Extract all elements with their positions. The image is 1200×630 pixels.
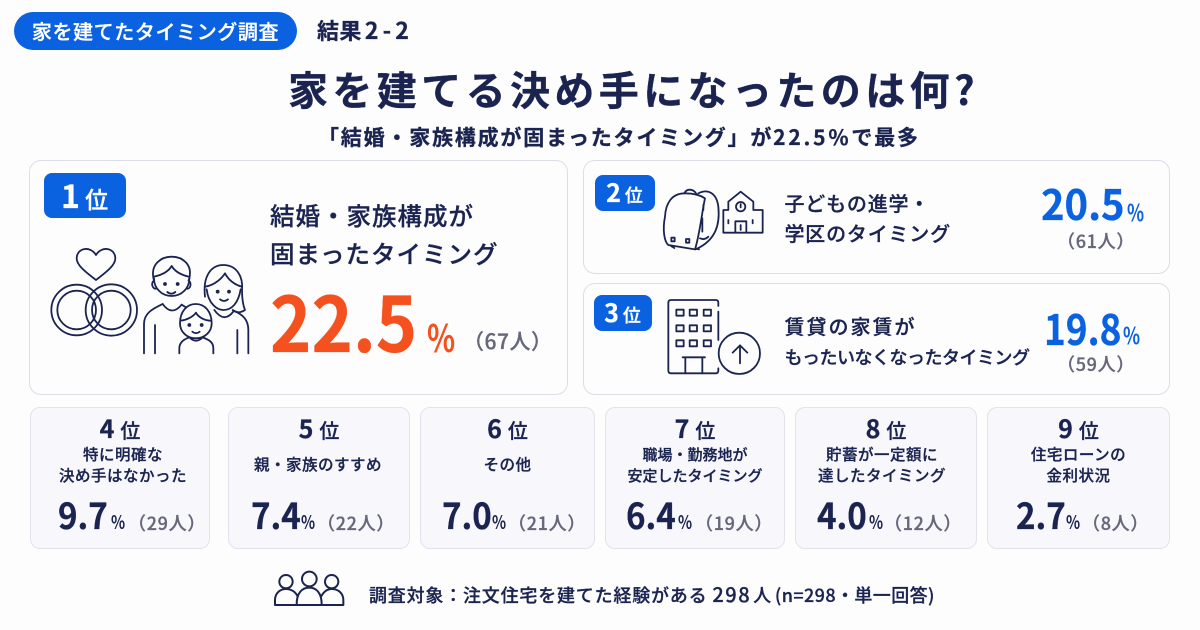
panel: rank 1 <box>29 160 568 395</box>
badge: 3rd place: 3 位 <box>604 294 641 330</box>
rank 7 label <box>627 444 762 486</box>
value: rank 3 percent: 19.8 <box>1044 296 1121 358</box>
tag: survey name: 家を建てたタイミング調査 <box>32 16 279 45</box>
rank 5 label: 親・家族のすすめ <box>254 453 382 475</box>
badge: 3rd place <box>594 294 652 330</box>
label: rank 3 reason: 賃貸の家賃が <box>784 310 916 340</box>
rank 4 percent sign: % <box>110 508 125 534</box>
rank 4 value: 9.7 <box>58 488 107 540</box>
rank 9 label: 金利状況 <box>1046 464 1110 486</box>
rank 9 label: 住宅ローンの <box>1031 443 1126 465</box>
rank 9 heading: 9 位 <box>1058 410 1099 446</box>
rank 6 percent sign: % <box>492 508 506 534</box>
backpack <box>664 190 719 249</box>
label: rank 2 reason <box>784 188 951 247</box>
panel: rank 3 <box>583 283 1170 395</box>
panel: rank 5 <box>228 407 410 549</box>
panel: rank 4 <box>30 407 210 549</box>
rank 6 value: 7.0 <box>442 488 491 540</box>
panel: rank 2 <box>583 160 1170 274</box>
count: rank 3: （59人） <box>1057 351 1135 377</box>
icon: apartment and arrow <box>667 299 761 375</box>
panel: rank 7 <box>605 407 785 549</box>
rank 4 count: （29人） <box>128 510 206 536</box>
subheading: 「結婚・家族構成が固まったタイミング」が22.5%で最多 <box>318 122 920 152</box>
rank 6 label: その他 <box>483 453 532 475</box>
rank 8 heading: 8 位 <box>866 410 906 446</box>
panel: rank 9 <box>987 407 1170 549</box>
footnote: survey target: 調査対象：注文住宅を建てた経験がある298人(n=298・単一回答) <box>369 579 935 608</box>
rank 5 count: （22人） <box>317 510 395 536</box>
child <box>179 304 213 353</box>
badge: 2nd place: 2 位 <box>606 174 643 210</box>
badge: 2nd place <box>594 174 654 210</box>
tag: survey name <box>14 12 297 50</box>
rank 9 value: 2.7 <box>1016 488 1065 540</box>
rank 6 count: （21人） <box>508 510 586 536</box>
label: rank 2 reason: 学区のタイミング <box>784 218 951 247</box>
rank 7 label: 安定したタイミング <box>627 465 762 486</box>
label: rank 1 reason: 結婚・家族構成が <box>270 198 474 233</box>
value: rank 1 percent: 22.5 <box>270 264 417 374</box>
value: rank 2 percent sign: % <box>1126 194 1144 228</box>
rank 6 heading: 6 位 <box>487 410 528 446</box>
rank 4 label: 決め手はなかった <box>59 464 187 486</box>
label: rank 1 reason: 固まったタイミング <box>270 236 499 271</box>
rank 4 heading: 4 位 <box>100 410 140 446</box>
school <box>723 192 763 233</box>
label: rank 2 reason: 子どもの進学・ <box>784 188 930 217</box>
rank 9 label <box>1031 443 1126 486</box>
label: rank 3 reason: もったいなくなったタイミング <box>784 344 1030 370</box>
icon: people <box>274 570 344 606</box>
rank 7 label: 職場・勤務地が <box>642 444 748 465</box>
icon: family <box>143 256 250 354</box>
rank 4 label: 特に明確な <box>83 443 163 465</box>
rank 5 percent sign: % <box>300 508 315 534</box>
value: rank 1 percent sign: % <box>426 308 455 362</box>
rank 8 percent sign: % <box>868 508 883 534</box>
father <box>144 257 191 353</box>
count: rank 2: （61人） <box>1057 228 1135 254</box>
rank 8 label <box>818 443 946 486</box>
subtitle: result number: 結果2-2 <box>317 12 413 46</box>
value: rank 2 percent: 20.5 <box>1041 172 1125 233</box>
value: rank 3 percent sign: % <box>1122 316 1140 350</box>
rank 7 value: 6.4 <box>626 488 675 540</box>
label: rank 3 reason <box>784 310 1030 370</box>
rank 8 count: （12人） <box>884 510 962 536</box>
title: 家を建てる決め手になったのは何? <box>288 59 979 117</box>
rank 8 value: 4.0 <box>816 488 866 540</box>
icon: rings and heart <box>50 248 138 337</box>
rank 7 count: （19人） <box>695 510 773 536</box>
icon: school backpack and school <box>662 188 764 250</box>
badge: 1st place <box>44 172 126 218</box>
rank 8 label: 貯蓄が一定額に <box>826 443 938 465</box>
rank 4 label <box>59 443 187 486</box>
badge: 1st place: 1 位 <box>61 172 108 218</box>
panel: rank 8 <box>795 407 977 549</box>
panel: rank 6 <box>420 407 595 549</box>
rank 7 percent sign: % <box>678 508 692 534</box>
rank 5 heading: 5 位 <box>299 410 339 446</box>
rank 8 label: 達したタイミング <box>818 464 946 486</box>
mother <box>205 265 248 353</box>
rank 9 count: （8人） <box>1082 510 1149 536</box>
rank 7 heading: 7 位 <box>675 410 715 446</box>
count: rank 1: （67人） <box>463 326 552 356</box>
rank 5 value: 7.4 <box>250 488 300 540</box>
rank 9 percent sign: % <box>1066 508 1080 534</box>
label: rank 1 reason <box>270 198 499 271</box>
